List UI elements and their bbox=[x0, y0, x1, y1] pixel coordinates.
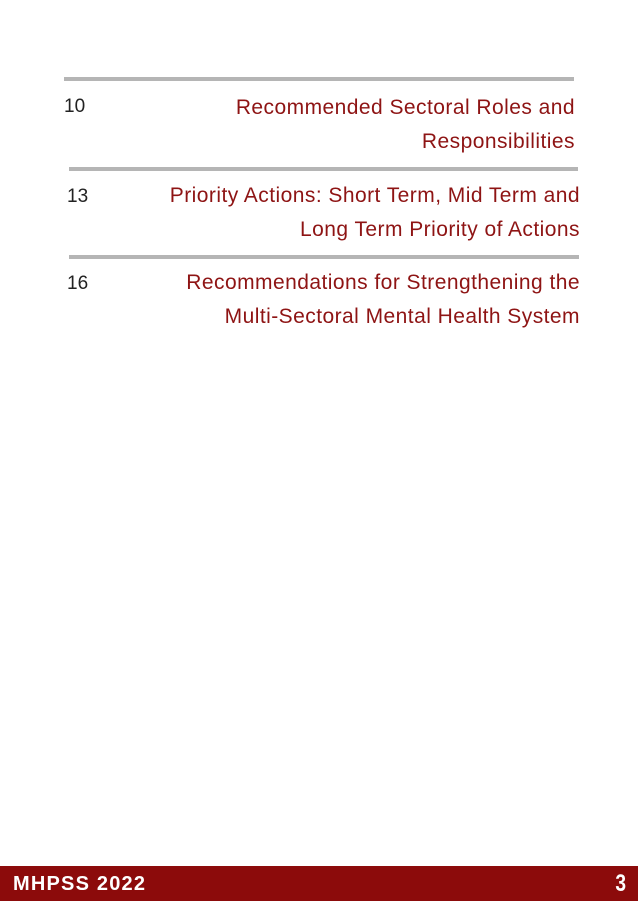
toc entry: 16 bbox=[67, 271, 580, 328]
title: priority actions bbox=[170, 184, 580, 241]
title: recommendations bbox=[186, 271, 580, 328]
footer band bbox=[0, 866, 638, 901]
title: recommendations: Multi-Sectoral Mental Health System bbox=[225, 305, 580, 328]
title: sectoral roles bbox=[236, 96, 575, 153]
title: sectoral roles: Recommended Sectoral Roles and bbox=[236, 96, 575, 119]
toc entry: 13 bbox=[67, 184, 580, 241]
page number 16: 16 bbox=[67, 273, 88, 294]
title: sectoral roles: Responsibilities bbox=[422, 130, 575, 153]
title: recommendations: Recommendations for Strengthening the bbox=[186, 271, 580, 294]
page number 13: 13 bbox=[67, 186, 88, 207]
toc entry: 10 bbox=[64, 96, 575, 153]
footer label: MHPSS 2022 bbox=[13, 873, 146, 895]
page number: 3 bbox=[615, 870, 626, 897]
page number 10: 10 bbox=[64, 96, 85, 117]
title: priority actions: Long Term Priority of Actions bbox=[300, 218, 580, 241]
title: priority actions: Priority Actions: Short Term, Mid Term and bbox=[170, 184, 580, 207]
